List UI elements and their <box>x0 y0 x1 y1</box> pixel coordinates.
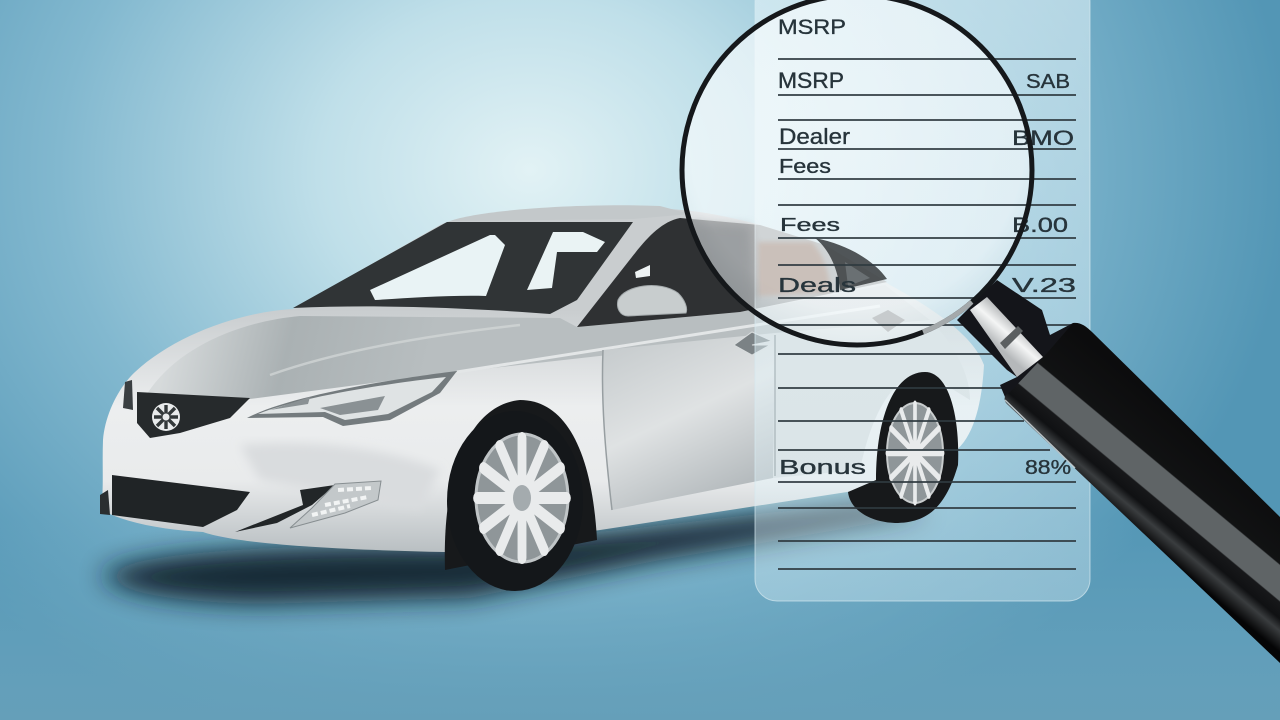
rear glass <box>527 232 605 290</box>
bumper shading <box>240 443 440 510</box>
front wheel <box>447 411 583 591</box>
magnifying glass <box>682 0 1280 663</box>
car seen through lens <box>690 222 905 332</box>
front wheel arch <box>445 400 597 570</box>
panel: price sheet <box>683 0 1090 601</box>
lens glass <box>683 0 1031 344</box>
car illustration <box>100 205 984 604</box>
badge <box>152 403 180 431</box>
sheet labels: V.23 <box>1012 275 1076 297</box>
metal collar <box>970 297 1043 377</box>
grille <box>137 392 250 438</box>
hood crease <box>270 325 520 375</box>
car body <box>101 207 984 552</box>
windshield <box>293 222 633 314</box>
sheet labels: MSRP <box>778 16 846 39</box>
handle <box>1005 323 1280 663</box>
shoulder highlight <box>457 306 880 372</box>
sheet labels: Deals <box>778 275 856 297</box>
lens rim <box>682 0 1032 345</box>
fog lamp <box>290 481 381 528</box>
ground shadow <box>100 500 930 604</box>
door handle through lens <box>872 310 905 332</box>
sheet labels: Fees <box>780 215 840 235</box>
lower grille <box>112 475 250 527</box>
sheet labels: 88% <box>1025 457 1071 479</box>
hood <box>147 285 930 399</box>
sheet lines <box>778 59 1076 569</box>
sheet labels <box>778 16 1076 479</box>
handle edge highlight <box>1005 400 1075 468</box>
sheet labels: Bonus <box>779 457 866 479</box>
side doors <box>602 320 970 510</box>
door handle <box>734 332 772 355</box>
rear wheel <box>848 372 958 523</box>
sheet labels: Fees <box>779 156 831 178</box>
fog slit <box>235 485 335 532</box>
sheet labels: SAB <box>1026 71 1070 93</box>
windshield glass <box>370 235 505 300</box>
sheet labels: BMO <box>1012 127 1074 150</box>
nose strip <box>123 380 133 410</box>
mirror <box>617 286 687 316</box>
neck <box>957 280 1100 410</box>
sheet labels: B.00 <box>1012 214 1068 237</box>
sheet labels: MSRP <box>778 68 844 93</box>
roof <box>450 205 690 221</box>
chin tip <box>100 490 110 515</box>
silver rim segment <box>923 302 972 332</box>
side window <box>577 218 887 327</box>
sheet labels: Dealer <box>779 124 850 149</box>
headlight <box>247 371 457 426</box>
